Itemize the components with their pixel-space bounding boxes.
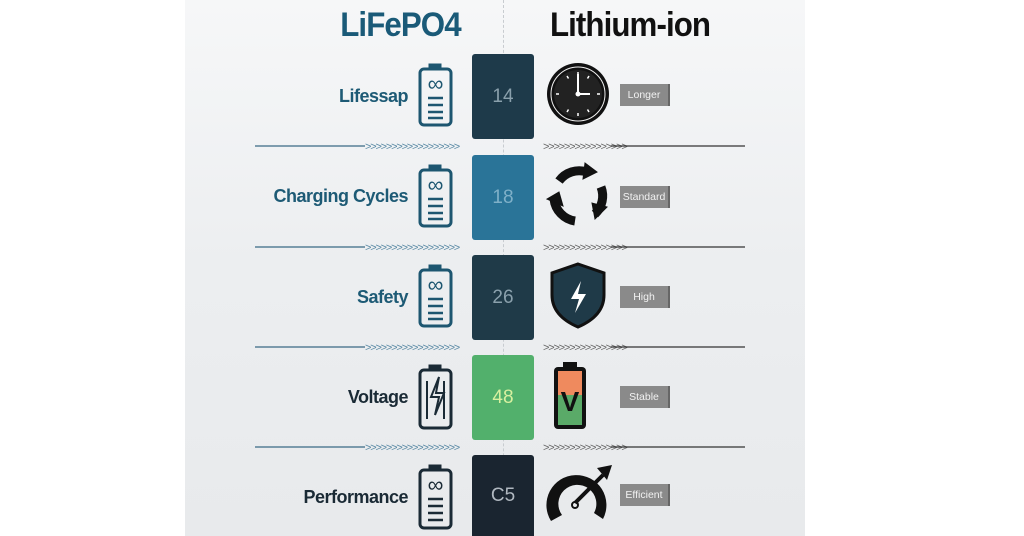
- icon: recycle: [547, 163, 607, 221]
- icon: battery 1: [420, 65, 451, 125]
- row dividers: >>>>>>>>>>>>>>>>>>: [365, 141, 460, 153]
- background panel: [185, 0, 805, 536]
- value box 18: [472, 155, 534, 240]
- tag: Stable: Stable: [629, 391, 659, 403]
- row 3 label: Safety: [357, 287, 408, 307]
- icon: battery 2: ∞: [428, 172, 443, 197]
- row 4 label: Voltage: [348, 387, 408, 407]
- value box 14: [472, 54, 534, 139]
- value box 26: 26: [492, 287, 514, 308]
- value box 14: 14: [492, 86, 514, 107]
- tag: Efficient: Efficient: [625, 489, 663, 501]
- icon: voltage battery: V: [561, 386, 580, 417]
- icon: battery 5: [420, 466, 451, 528]
- icon: shield bolt: [552, 264, 604, 327]
- tag: High: High: [633, 291, 655, 303]
- icon: battery bolt: [420, 366, 451, 428]
- battery icons column: [418, 64, 452, 530]
- icon: clock: [547, 63, 609, 125]
- row dividers: >>>>>>>>>>>>>>>>: [543, 141, 627, 153]
- value box 18: 18: [492, 187, 514, 208]
- value box 26: [472, 255, 534, 340]
- icon: battery 1: ∞: [428, 71, 443, 96]
- row 1 label: Lifessap: [339, 86, 408, 106]
- tag: Stable: [620, 386, 670, 408]
- right icons column: [546, 63, 612, 521]
- value box C5: C5: [491, 485, 515, 506]
- icon: battery 3: ∞: [428, 272, 443, 297]
- icon: battery 5: ∞: [428, 472, 443, 497]
- value box 48: [472, 355, 534, 440]
- tag: High: [620, 286, 670, 308]
- title: Lithium-ion: Lithium-ion: [550, 6, 710, 44]
- icon: battery 3: [420, 266, 451, 326]
- value box C5: [472, 455, 534, 536]
- icon: voltage battery: [554, 362, 586, 429]
- tag: Standard: Standard: [623, 191, 665, 203]
- tag: Efficient: [620, 484, 670, 506]
- icon: battery 2: [420, 166, 451, 226]
- row 2 label: Charging Cycles: [273, 186, 408, 206]
- row 5 label: Performance: [303, 487, 408, 507]
- tag: Longer: Longer: [628, 89, 660, 101]
- icon: speedometer: [546, 465, 612, 521]
- value box 48: 48: [492, 387, 514, 408]
- tag: Standard: [620, 186, 670, 208]
- tag: Longer: [620, 84, 670, 106]
- title: LiFePO4: LiFePO4: [340, 6, 461, 44]
- row dividers: [255, 141, 745, 450]
- center dashed line: [503, 0, 504, 536]
